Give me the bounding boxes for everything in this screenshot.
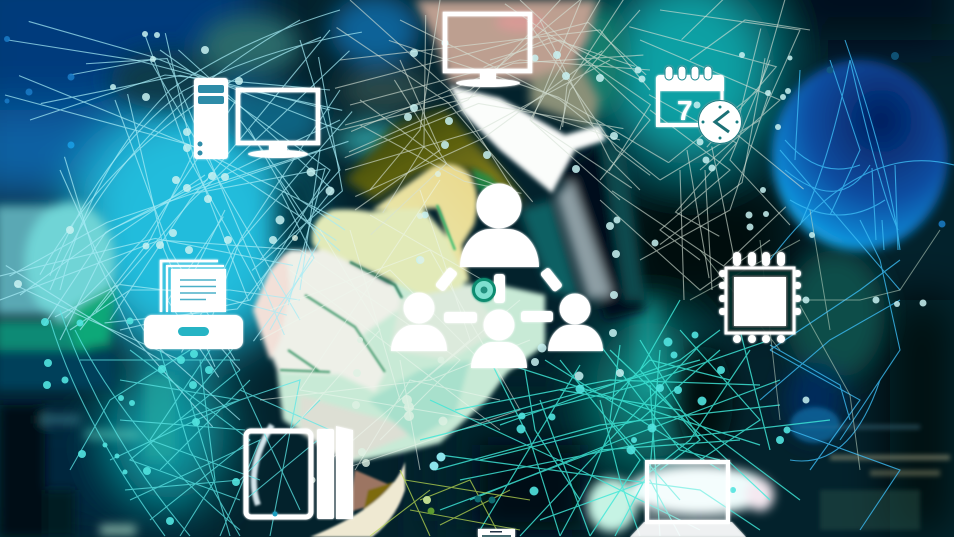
icon: chip [719,252,801,343]
finger creases [280,205,455,372]
blue lens glow [772,60,948,250]
icon: printer [144,261,243,349]
network lines: right pale [690,210,940,470]
forearm swoosh and cuff [254,425,405,537]
icon: top monitor [445,14,530,87]
face, shirt, suit and tie [345,0,645,320]
shirt collar [450,86,606,193]
city streaks right [790,407,950,530]
network lines: top center [340,0,810,300]
icon: desktop computer [194,78,318,159]
icon: calendar with clock: 7 [677,95,693,126]
network lines: left echo [0,0,367,440]
hand right blur [587,466,774,532]
network lines: olive [370,470,530,536]
icon: tablet and books [246,426,353,519]
network lines: bottom center [420,300,830,536]
icon: bottom device [478,529,515,537]
network lines: lower left [50,310,330,536]
hand [253,164,545,462]
icon: laptop [630,462,746,537]
icon: calendar with clock [656,66,742,144]
network lines: top echo [327,0,834,326]
network lines: right blue [760,40,954,530]
network lines: hand [260,180,530,470]
network lines: left [0,10,345,420]
network nodes [14,31,926,404]
left lens glow and green band [0,202,175,537]
icon: people network [391,184,603,368]
